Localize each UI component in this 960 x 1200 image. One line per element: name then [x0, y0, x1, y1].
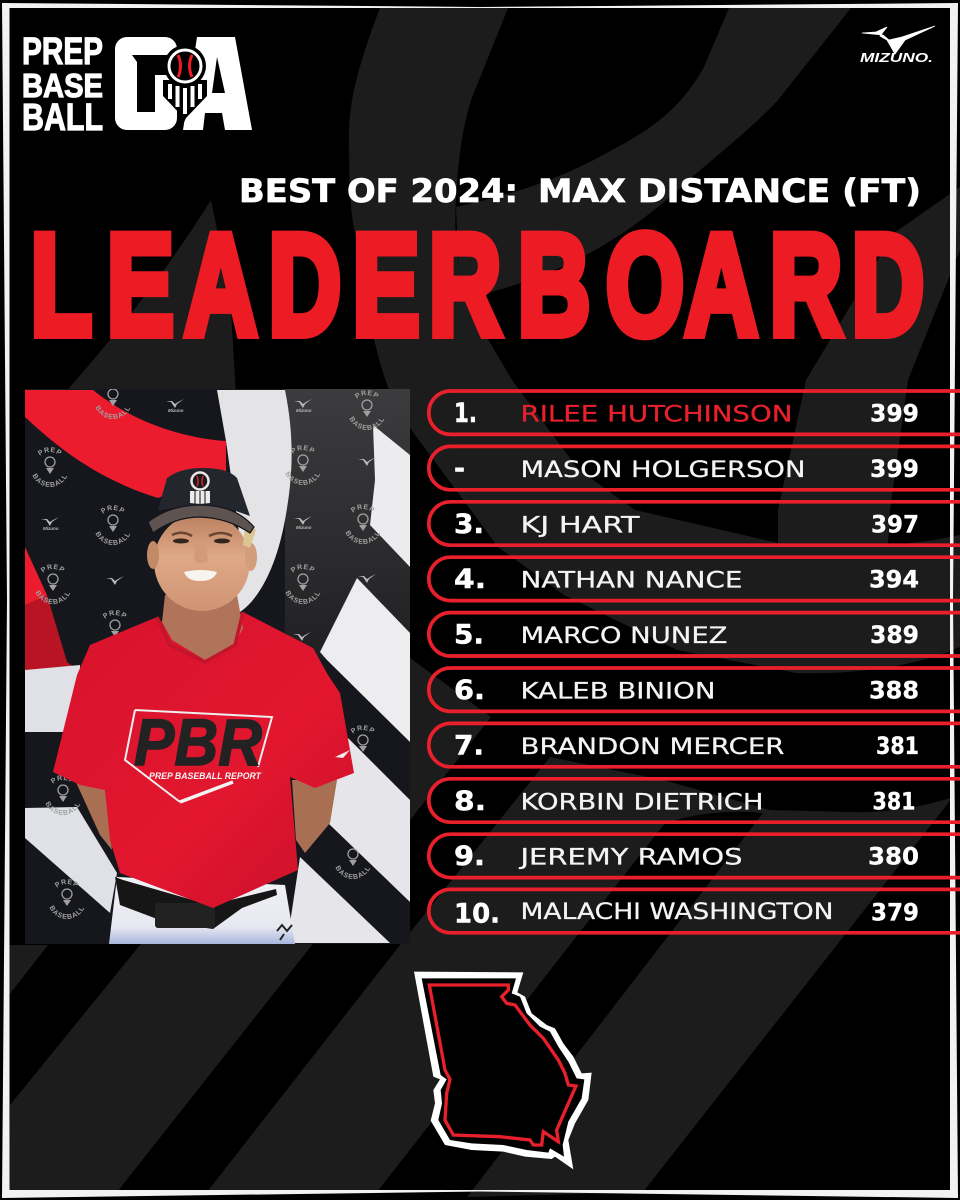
logo wordmark: PREP BASEBALL: PREP — [22, 31, 103, 73]
subtitle: best of 2024 max distance — [239, 172, 921, 210]
row 4: 4. — [454, 564, 486, 595]
row 10: 379 — [871, 898, 919, 926]
logo wordmark: PREP BASEBALL — [22, 31, 103, 139]
row 1: 1. — [454, 398, 477, 429]
backdrop logo marks: PREP — [100, 379, 126, 389]
shirt logo: PBR: PREP BASEBALL REPORT — [149, 771, 262, 782]
backdrop logo marks: PREP — [350, 504, 374, 512]
row 7: BRANDON MERCER — [520, 735, 784, 760]
row 5: 5. — [454, 620, 484, 651]
row 2: 399 — [870, 455, 919, 483]
row 3: 3. — [454, 509, 484, 540]
row 9 — [429, 834, 960, 878]
backdrop logo marks: PREP — [50, 776, 72, 784]
backdrop logo marks: BASEBALL — [346, 530, 380, 544]
row 5: MARCO NUNEZ — [520, 624, 728, 649]
row 1: RILEE HUTCHINSON — [520, 402, 792, 428]
backdrop logo marks: BASEBALL — [286, 471, 320, 486]
backdrop logo marks: Mizuno — [296, 525, 312, 530]
backdrop logo marks: PREP — [54, 879, 78, 888]
row 8 — [429, 779, 960, 822]
backdrop logo marks: PREP — [40, 564, 64, 572]
row 2: - — [454, 453, 465, 484]
row 4: 394 — [869, 566, 919, 594]
row 4 — [429, 557, 960, 601]
row 9: JEREMY RAMOS — [518, 846, 742, 871]
row 6: 388 — [869, 676, 919, 704]
backdrop logo marks: BASEBALL — [96, 405, 130, 420]
row 2 — [429, 446, 960, 490]
row 7: 381 — [876, 732, 919, 760]
backdrop logo marks: Mizuno — [168, 408, 184, 413]
backdrop logo marks: BASEBALL — [32, 473, 68, 488]
row 3: KJ HART — [520, 513, 640, 538]
row 6: KALEB BINION — [520, 680, 716, 704]
title: leaderboard: LEADERBOARD — [31, 205, 924, 365]
row 5: 389 — [870, 621, 919, 649]
backdrop logo marks: BASEBALL — [96, 531, 130, 546]
row 10: MALACHI WASHINGTON — [520, 900, 834, 925]
backdrop logo marks: Mizuno — [43, 526, 59, 531]
backdrop logo marks: PREP — [354, 390, 378, 398]
row 2: MASON HOLGERSON — [520, 458, 806, 483]
backdrop logo marks: PREP — [100, 505, 124, 514]
row 1 — [429, 391, 960, 434]
subtitle: best of 2024 max distance: BEST OF 2024: — [239, 172, 518, 210]
backdrop logo marks: PREP — [38, 447, 62, 456]
backdrop logo marks: Mizuno — [296, 408, 312, 413]
row 8: KORBIN DIETRICH — [520, 790, 764, 815]
backdrop logo marks: PREP — [290, 445, 314, 454]
red t-shirt — [53, 612, 354, 908]
logo letter: A: A — [186, 20, 248, 154]
logo: Prep Baseball Georgia — [22, 20, 252, 154]
row 6: 6. — [454, 675, 485, 706]
row 7: 7. — [454, 730, 484, 761]
row 3 — [429, 502, 960, 545]
arms — [75, 780, 337, 853]
shirt logo: PBR — [125, 705, 350, 802]
logo wordmark: PREP BASEBALL: BASE — [22, 67, 103, 104]
row 6 — [429, 668, 960, 711]
row 9: 9. — [454, 841, 485, 872]
backdrop logo marks: BASEBALL — [36, 590, 70, 604]
logo letter: G: G — [117, 22, 173, 150]
row 5 — [429, 613, 960, 656]
logo wordmark: PREP BASEBALL: BALL — [22, 97, 103, 139]
backdrop logo marks: PREP — [290, 564, 314, 572]
backdrop logo marks: BASEBALL — [336, 865, 370, 880]
row 9: 380 — [868, 843, 919, 871]
player photo — [25, 389, 410, 944]
backdrop logo marks: BASEBALL — [50, 905, 84, 920]
backdrop logo marks: BASEBALL — [350, 416, 384, 430]
photo backdrop — [25, 389, 410, 944]
row 10 — [429, 889, 960, 933]
row 7 — [429, 723, 960, 767]
row 8: 381 — [872, 787, 916, 815]
leaderboard rows — [429, 391, 960, 933]
cap with logo — [148, 468, 254, 533]
logo badge: baseball shield — [163, 45, 207, 131]
backdrop logo marks — [32, 389, 384, 920]
row 8: 8. — [454, 786, 486, 817]
row 10: 10. — [454, 898, 500, 930]
backdrop logo marks: BASEBALL — [286, 590, 320, 604]
subtitle: best of 2024 max distance: MAX DISTANCE (FT) — [538, 172, 921, 210]
backdrop logo marks: PREP — [102, 610, 126, 618]
backdrop logo marks: BASEBALL — [46, 801, 80, 816]
shirt logo: PBR: PBR — [134, 705, 262, 779]
row 1: 399 — [870, 400, 919, 428]
backdrop logo marks: PREP — [350, 725, 374, 734]
logo: Mizuno — [860, 26, 935, 65]
player figure — [53, 468, 354, 944]
logo: Mizuno: MIZUNO. — [860, 50, 933, 65]
row 4: NATHAN NANCE — [520, 569, 742, 594]
neck and head — [147, 513, 257, 662]
row 3: 397 — [871, 510, 919, 538]
pants and belt — [109, 877, 295, 944]
icon: Georgia state outline — [414, 972, 592, 1169]
